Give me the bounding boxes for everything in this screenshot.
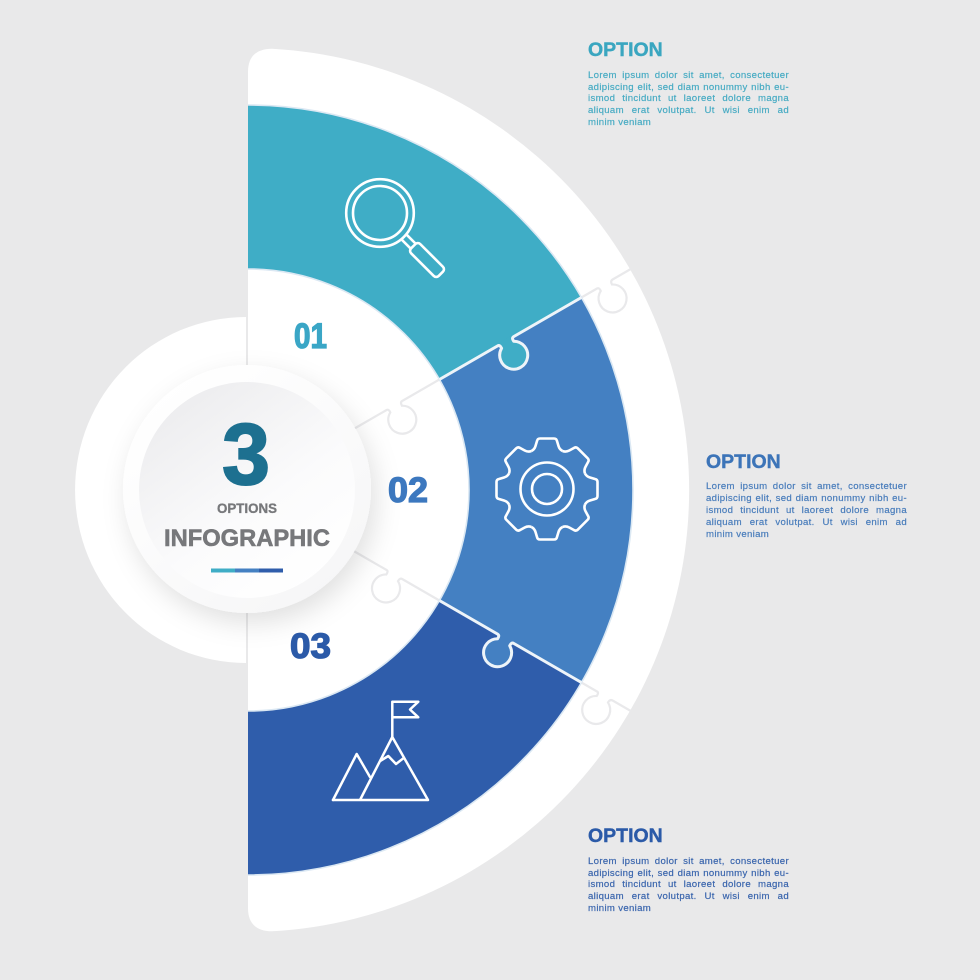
big number 3: 3 xyxy=(222,407,270,503)
number 01: 01 xyxy=(294,317,327,356)
text block: option 1 xyxy=(588,39,789,128)
text block: option 3 xyxy=(588,825,789,914)
text block: option 2: adipiscing elit, sed diam nonummy nibh eu- xyxy=(706,493,907,504)
text block: option 1: ismod tincidunt ut laoreet dolore magna xyxy=(588,93,789,104)
text block: option 1: OPTION xyxy=(588,39,663,61)
text block: option 2: OPTION xyxy=(706,450,781,472)
text block: option 1: adipiscing elit, sed diam nonummy nibh eu- xyxy=(588,82,789,93)
text block: option 3: OPTION xyxy=(588,825,663,847)
text block: option 2 xyxy=(706,450,907,540)
panel: left white half disc xyxy=(75,317,246,663)
icon: gear xyxy=(496,438,598,540)
text block: option 3: adipiscing elit, sed diam nonummy nibh eu- xyxy=(588,868,789,879)
center disc xyxy=(123,365,371,613)
text block: option 2: Lorem ipsum dolor sit amet, consectetuer xyxy=(706,481,907,492)
puzzle joint: teal into mid blue xyxy=(438,296,596,406)
text block: option 1: aliquam erat volutpat. Ut wisi enim ad xyxy=(588,105,789,116)
text block: option 1: Lorem ipsum dolor sit amet, consectetuer xyxy=(588,70,789,81)
ring edge highlights xyxy=(248,105,633,875)
icon: mountain with flag xyxy=(333,702,428,800)
text block: option 3: ismod tincidunt ut laoreet dolore magna xyxy=(588,879,789,890)
text block: option 2: minim veniam xyxy=(706,529,769,540)
label: infographic: INFOGRAPHIC xyxy=(164,525,330,552)
puzzle joint: mid blue into dark blue xyxy=(424,599,582,709)
segment 1: teal xyxy=(248,105,581,380)
text block: option 2: aliquam erat volutpat. Ut wisi enim ad xyxy=(706,517,907,528)
text block: option 3: aliquam erat volutpat. Ut wisi enim ad xyxy=(588,891,789,902)
number 03: 03 xyxy=(290,627,331,666)
text block: option 3: minim veniam xyxy=(588,903,651,914)
panel: outer white half ring xyxy=(248,49,689,931)
icon: magnifying glass xyxy=(332,165,465,298)
text block: option 1: minim veniam xyxy=(588,117,651,128)
label: options: OPTIONS xyxy=(217,501,277,516)
segment 3: dark blue xyxy=(248,600,581,875)
text block: option 2: ismod tincidunt ut laoreet dolore magna xyxy=(706,505,907,516)
puzzle outlines: faint outer and inner connectors xyxy=(339,269,646,737)
number 02: 02 xyxy=(388,471,428,510)
text block: option 3: Lorem ipsum dolor sit amet, consectetuer xyxy=(588,856,789,867)
tri-colour bar xyxy=(211,568,283,572)
segment 2: mid blue xyxy=(439,298,633,682)
